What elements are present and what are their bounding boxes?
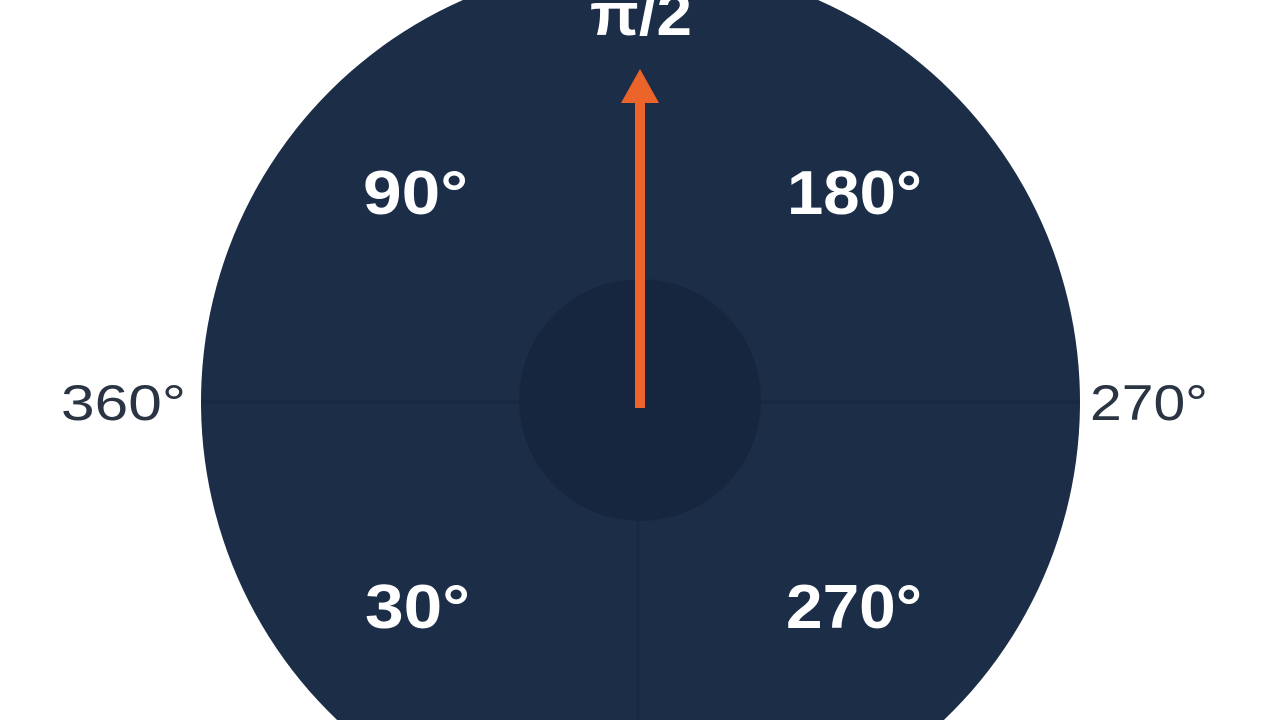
- quadrant label: 30: 30°: [365, 573, 470, 642]
- arrow pointing up: [621, 69, 659, 408]
- quadrant label: 90: 90°: [363, 159, 468, 228]
- quadrant label: 180: 180°: [787, 159, 922, 228]
- outer label: 270: 270°: [1090, 375, 1208, 431]
- center hub: [519, 279, 761, 521]
- main disc: [201, 0, 1080, 720]
- outer label: 360: 360°: [61, 375, 186, 431]
- quadrant label: 270: 270°: [786, 573, 922, 642]
